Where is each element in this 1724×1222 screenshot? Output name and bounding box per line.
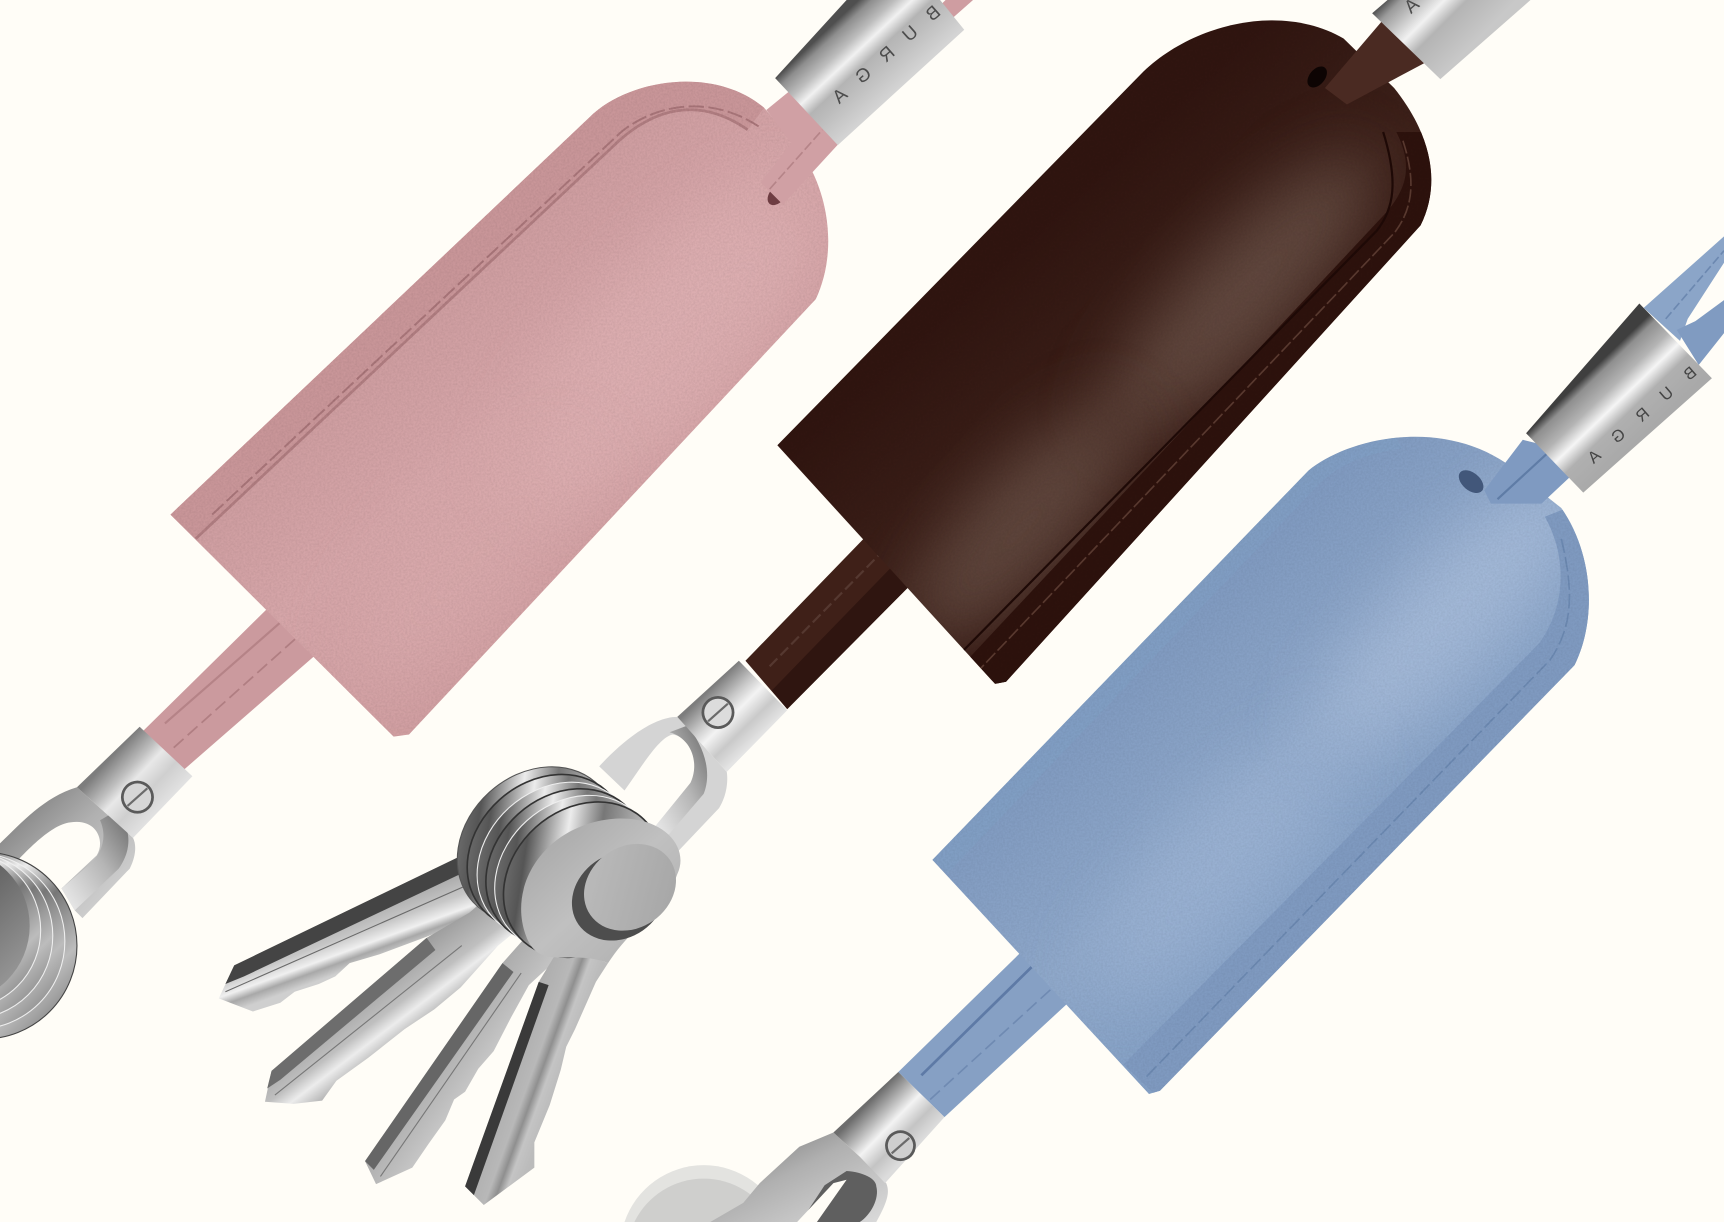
fob loop: [710, 1132, 888, 1222]
brown strap hole: [1304, 63, 1331, 91]
screw: [885, 1130, 916, 1161]
engraved brand text: BURGA: [1570, 363, 1700, 480]
blue key pouch set: [625, 236, 1724, 1222]
pink lower strap: [143, 588, 335, 772]
key 1: [219, 847, 528, 1012]
clamp: [677, 661, 787, 772]
blue strap hole: [1455, 466, 1488, 498]
brown key ring: [219, 661, 787, 1205]
brown upper strap: [1325, 20, 1427, 104]
pink rings stack: [0, 849, 77, 1039]
pink key ring clasp: [0, 727, 192, 1039]
pink fob loop: [0, 787, 135, 918]
blue lower strap: [898, 935, 1088, 1117]
blue upper straps: [1644, 236, 1724, 365]
key head plate: [521, 819, 680, 963]
brown lower strap: [745, 522, 929, 709]
pink fob screw: [121, 781, 154, 814]
screw: [701, 696, 734, 729]
blue key ring: [625, 1072, 944, 1222]
brown leather pouch: [770, 0, 1451, 704]
pivot cap: [555, 826, 693, 959]
engraved brand text: BURGA: [815, 1, 944, 119]
clamp: [833, 1072, 944, 1183]
blue strap to clasp: [1484, 440, 1574, 504]
blue top metal clasp: [1526, 303, 1712, 493]
disc behind fob: [625, 1165, 783, 1222]
key 2: [265, 891, 539, 1104]
pink upper strap: [761, 0, 973, 205]
key 3: [365, 935, 572, 1184]
pink key pouch set: [0, 0, 973, 1039]
blue leather pouch: [924, 418, 1621, 1100]
brown key pouch set: [219, 0, 1530, 1205]
metal disc stack: [426, 735, 694, 989]
brown top metal clasp: [1372, 0, 1530, 79]
pink strap hole: [764, 180, 791, 209]
pink leather pouch: [170, 82, 828, 737]
key 4: [465, 946, 608, 1205]
pink top metal clasp: [775, 0, 964, 145]
fob loop: [599, 717, 727, 852]
